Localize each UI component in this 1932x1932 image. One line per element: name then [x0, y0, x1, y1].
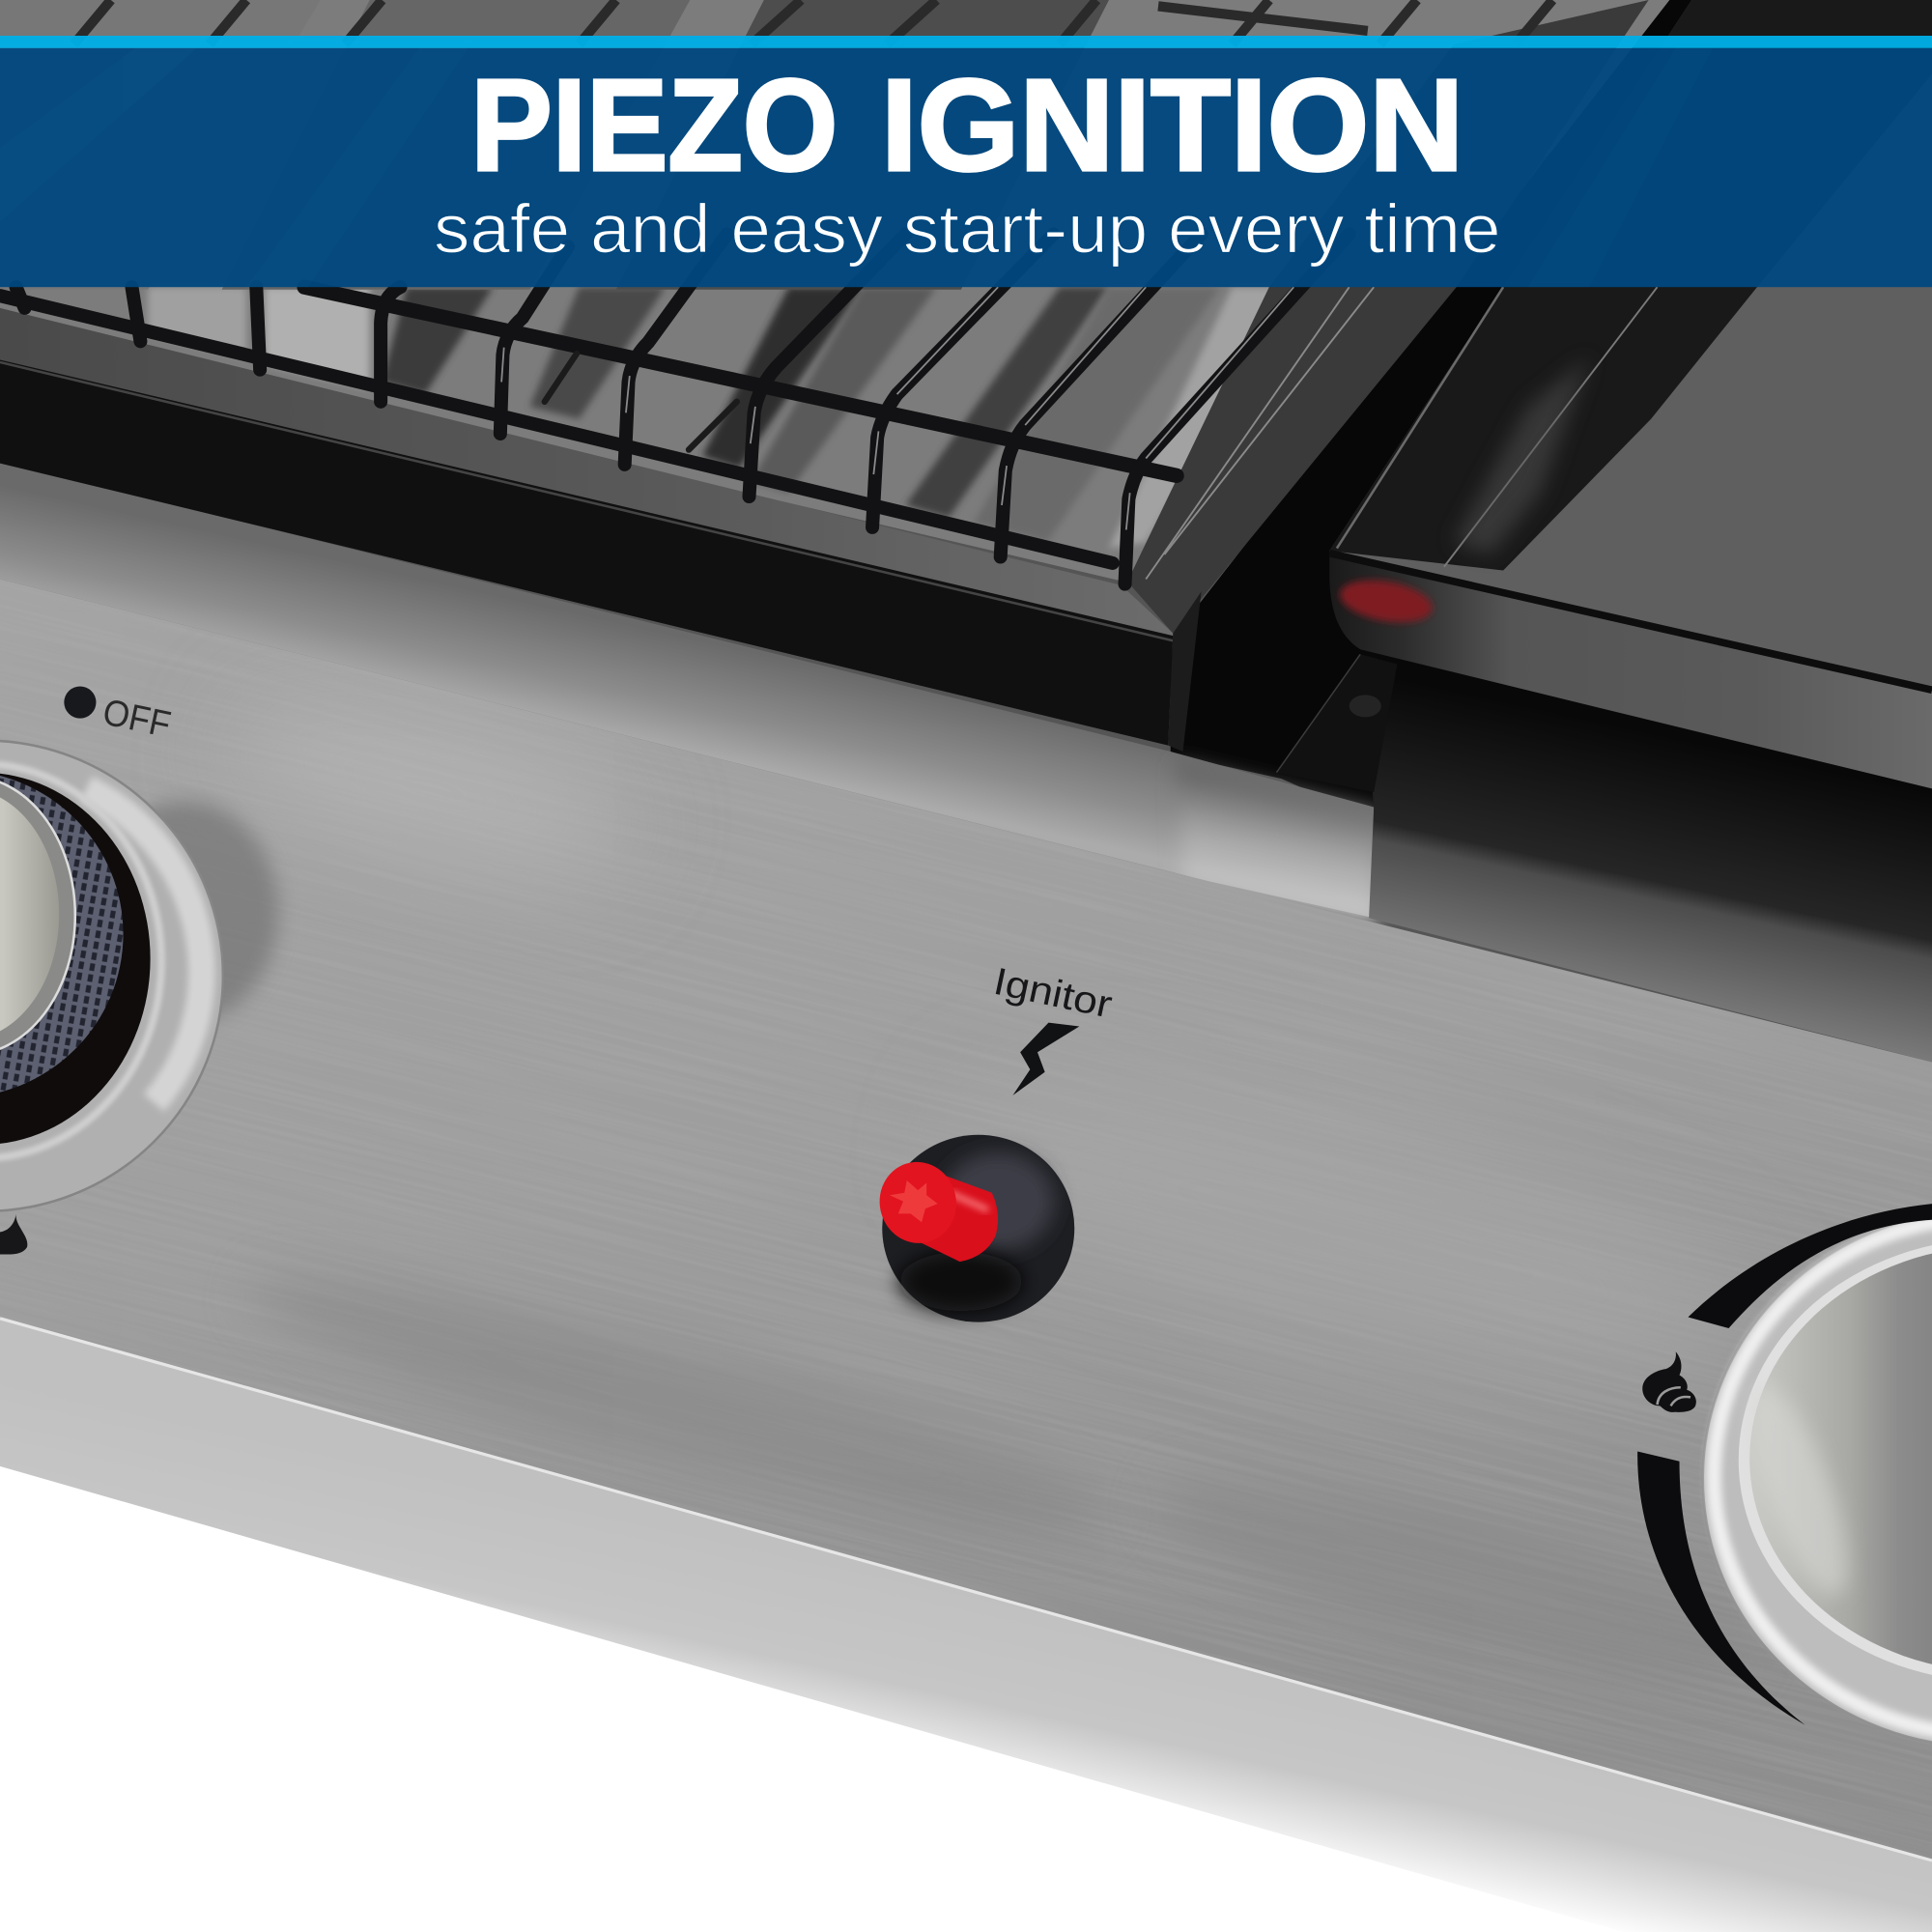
- knurled ring: [0, 770, 124, 1097]
- grill wire rack: [0, 234, 1350, 584]
- seam backing for upper photo: [0, 0, 1932, 1109]
- star recess: [890, 1180, 938, 1222]
- lip ridge lines: [1146, 287, 1374, 579]
- grill tray right lip: [1127, 0, 1649, 634]
- icon: flame: [1642, 1351, 1696, 1412]
- Ignitor label: Ignitor: [990, 960, 1116, 1027]
- grill tray interior: [0, 0, 1725, 585]
- black base: [882, 1135, 1074, 1322]
- griddle plate surface: [1329, 0, 1932, 690]
- right dial upper arc: [1688, 1204, 1932, 1328]
- griddle reflection line: [1444, 287, 1658, 567]
- left burner knob: [0, 741, 223, 1211]
- extra rear wires: [545, 354, 737, 450]
- griddle front rim: [1329, 551, 1932, 788]
- heading: [470, 52, 1463, 198]
- grill tray top rim: [0, 308, 1173, 653]
- brushed metal texture: [0, 534, 1932, 1881]
- chrome bezel: [0, 741, 223, 1211]
- griddle left edge highlight: [1337, 287, 1503, 549]
- bracket screw: [1350, 695, 1381, 717]
- OFF label: OFF: [99, 691, 174, 746]
- tray front edge highlight: [0, 362, 1173, 640]
- panel shadow on white surface: [0, 1319, 1932, 1932]
- panel bottom edge: [0, 1319, 1932, 1861]
- OFF indicator dot: [64, 686, 96, 719]
- rack wire highlights: [501, 287, 1293, 529]
- banner accent strip: [0, 36, 1932, 48]
- lower rack rod: [0, 296, 1113, 563]
- stainless control panel front face: [0, 579, 1932, 1861]
- left knob shadow: [91, 801, 278, 1023]
- banner background: [0, 48, 1932, 287]
- knob cap: [1749, 1246, 1932, 1672]
- rack above the banner: [74, 0, 1552, 44]
- ignitor button: [872, 1135, 1074, 1322]
- chrome bezel: [1703, 1210, 1932, 1747]
- dark backing behind griddle and bracket: [1171, 0, 1932, 863]
- griddle dark reflection band: [1329, 0, 1932, 571]
- griddle bracket: [1276, 654, 1397, 792]
- griddle speckle highlight: [1454, 357, 1589, 554]
- banner streaks: [0, 48, 1713, 287]
- icon: lightning bolt: [1012, 1023, 1079, 1095]
- dark reflective surface below griddle: [1360, 649, 1932, 1062]
- light reflections on panel: [212, 672, 1789, 1717]
- top surface of control panel: [0, 462, 1374, 918]
- upper rack rod: [304, 287, 1177, 475]
- grill tray front face: [0, 359, 1173, 746]
- tray right corner: [1168, 591, 1202, 752]
- banner: [0, 36, 1932, 287]
- red cap face: [872, 1155, 964, 1250]
- heading: IGNITION: [881, 52, 1463, 198]
- right dial lower arc: [1637, 1452, 1805, 1725]
- rack wires: [16, 234, 1350, 584]
- bright highlight on panel fold: [1177, 761, 1380, 924]
- heading: PIEZO: [470, 52, 838, 198]
- subheading: safe and easy start-up every time: [434, 190, 1501, 268]
- knob cap: [0, 777, 75, 1055]
- right burner knob: [1703, 1210, 1932, 1747]
- red cap body: [912, 1164, 998, 1262]
- left flame icon partial: [0, 1213, 27, 1255]
- dark recess: [0, 773, 151, 1145]
